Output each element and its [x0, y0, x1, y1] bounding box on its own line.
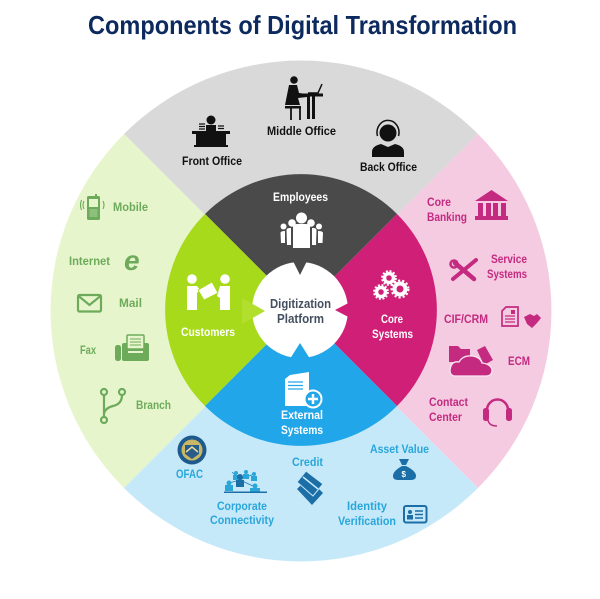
- front office label: Front Office: [182, 156, 242, 168]
- icon: gears: [374, 271, 408, 299]
- branch label: Branch: [136, 400, 171, 412]
- cif/crm label: CIF/CRM: [444, 314, 488, 326]
- icon: corporate network: [224, 470, 267, 493]
- mail label: Mail: [119, 298, 142, 310]
- asset value label: Asset Value: [370, 444, 429, 456]
- icon: branch: [101, 389, 125, 423]
- identity verification label: Verification: [338, 516, 396, 528]
- icon: ofac seal: [178, 436, 206, 464]
- icon: front office desk: [192, 116, 230, 147]
- back office label: Back Office: [360, 162, 417, 174]
- outer ring panel: customer channels: [51, 134, 301, 488]
- hub label: [270, 297, 331, 326]
- outer ring panel: employees channels: [124, 61, 478, 311]
- outer ring panel: core systems: [301, 134, 551, 488]
- core banking label: Core: [427, 197, 451, 209]
- icon: money bag: [393, 459, 416, 480]
- inner ring: employees segment: [205, 174, 397, 310]
- core systems label: Core: [381, 314, 403, 326]
- icon: server with plus: [285, 372, 322, 408]
- mobile label: Mobile: [113, 202, 148, 214]
- core systems label: Systems: [372, 329, 413, 341]
- icon: fax machine: [115, 335, 149, 361]
- outer ring panel: external systems: [124, 311, 478, 561]
- core systems label: [372, 314, 413, 341]
- icon: money bag: $: [402, 470, 406, 479]
- corporate connectivity label: Connectivity: [210, 515, 275, 527]
- middle office label: Middle Office: [267, 126, 336, 138]
- inner ring: external systems segment: [205, 310, 397, 446]
- icon: credit cards: [297, 471, 323, 505]
- credit label: Credit: [292, 457, 323, 469]
- icon: folders and cloud: [449, 346, 493, 376]
- service systems label: Service: [491, 254, 527, 266]
- identity verification label: Identity: [347, 501, 388, 513]
- icon: envelope: [78, 295, 101, 312]
- icon: customers exchanging document: [187, 274, 230, 310]
- arrow: external systems into hub: [288, 343, 312, 362]
- internet label: Internet: [69, 256, 110, 268]
- icon: handshake: [524, 314, 541, 328]
- centre hub: digitization platform: [242, 255, 358, 362]
- icon: wrench and screwdriver: [450, 260, 476, 279]
- icon: employee group: [280, 212, 323, 248]
- icon: mobile phone: [80, 194, 104, 220]
- icon: headset agent: [372, 120, 404, 157]
- core banking label: [427, 197, 467, 224]
- arrow: core systems into hub: [335, 298, 358, 322]
- contact center label: Center: [429, 412, 462, 424]
- inner ring: core systems segment: [301, 214, 437, 406]
- fax label: Fax: [80, 345, 96, 357]
- contact center label: Contact: [429, 397, 468, 409]
- hub label: Digitization: [270, 297, 331, 311]
- employees label: Employees: [273, 192, 328, 204]
- ofac label: OFAC: [176, 469, 203, 481]
- arrow: employees into hub: [290, 255, 310, 275]
- service systems label: [487, 254, 527, 281]
- identity verification label: [338, 501, 396, 528]
- external systems label: Systems: [281, 425, 323, 437]
- arrow: customers into hub: [242, 298, 265, 324]
- ecm label: ECM: [508, 356, 530, 368]
- icon: document: [502, 307, 518, 326]
- icon: bank building: [475, 190, 508, 220]
- core banking label: Banking: [427, 212, 467, 224]
- external systems label: External: [281, 410, 323, 422]
- external systems label: [281, 410, 323, 437]
- customers label: Customers: [181, 327, 235, 339]
- icon: internet browser: e: [124, 245, 140, 276]
- icon: id card: [404, 506, 426, 522]
- inner ring: customers segment: [165, 214, 301, 406]
- contact center label: [429, 397, 468, 424]
- icon: person at laptop: [285, 76, 323, 120]
- title: Components of Digital Transformation: [88, 10, 517, 40]
- corporate connectivity label: Corporate: [217, 501, 267, 513]
- service systems label: Systems: [487, 269, 527, 281]
- hub label: Platform: [277, 312, 324, 326]
- corporate connectivity label: [210, 501, 275, 527]
- icon: contact headset: [483, 400, 512, 426]
